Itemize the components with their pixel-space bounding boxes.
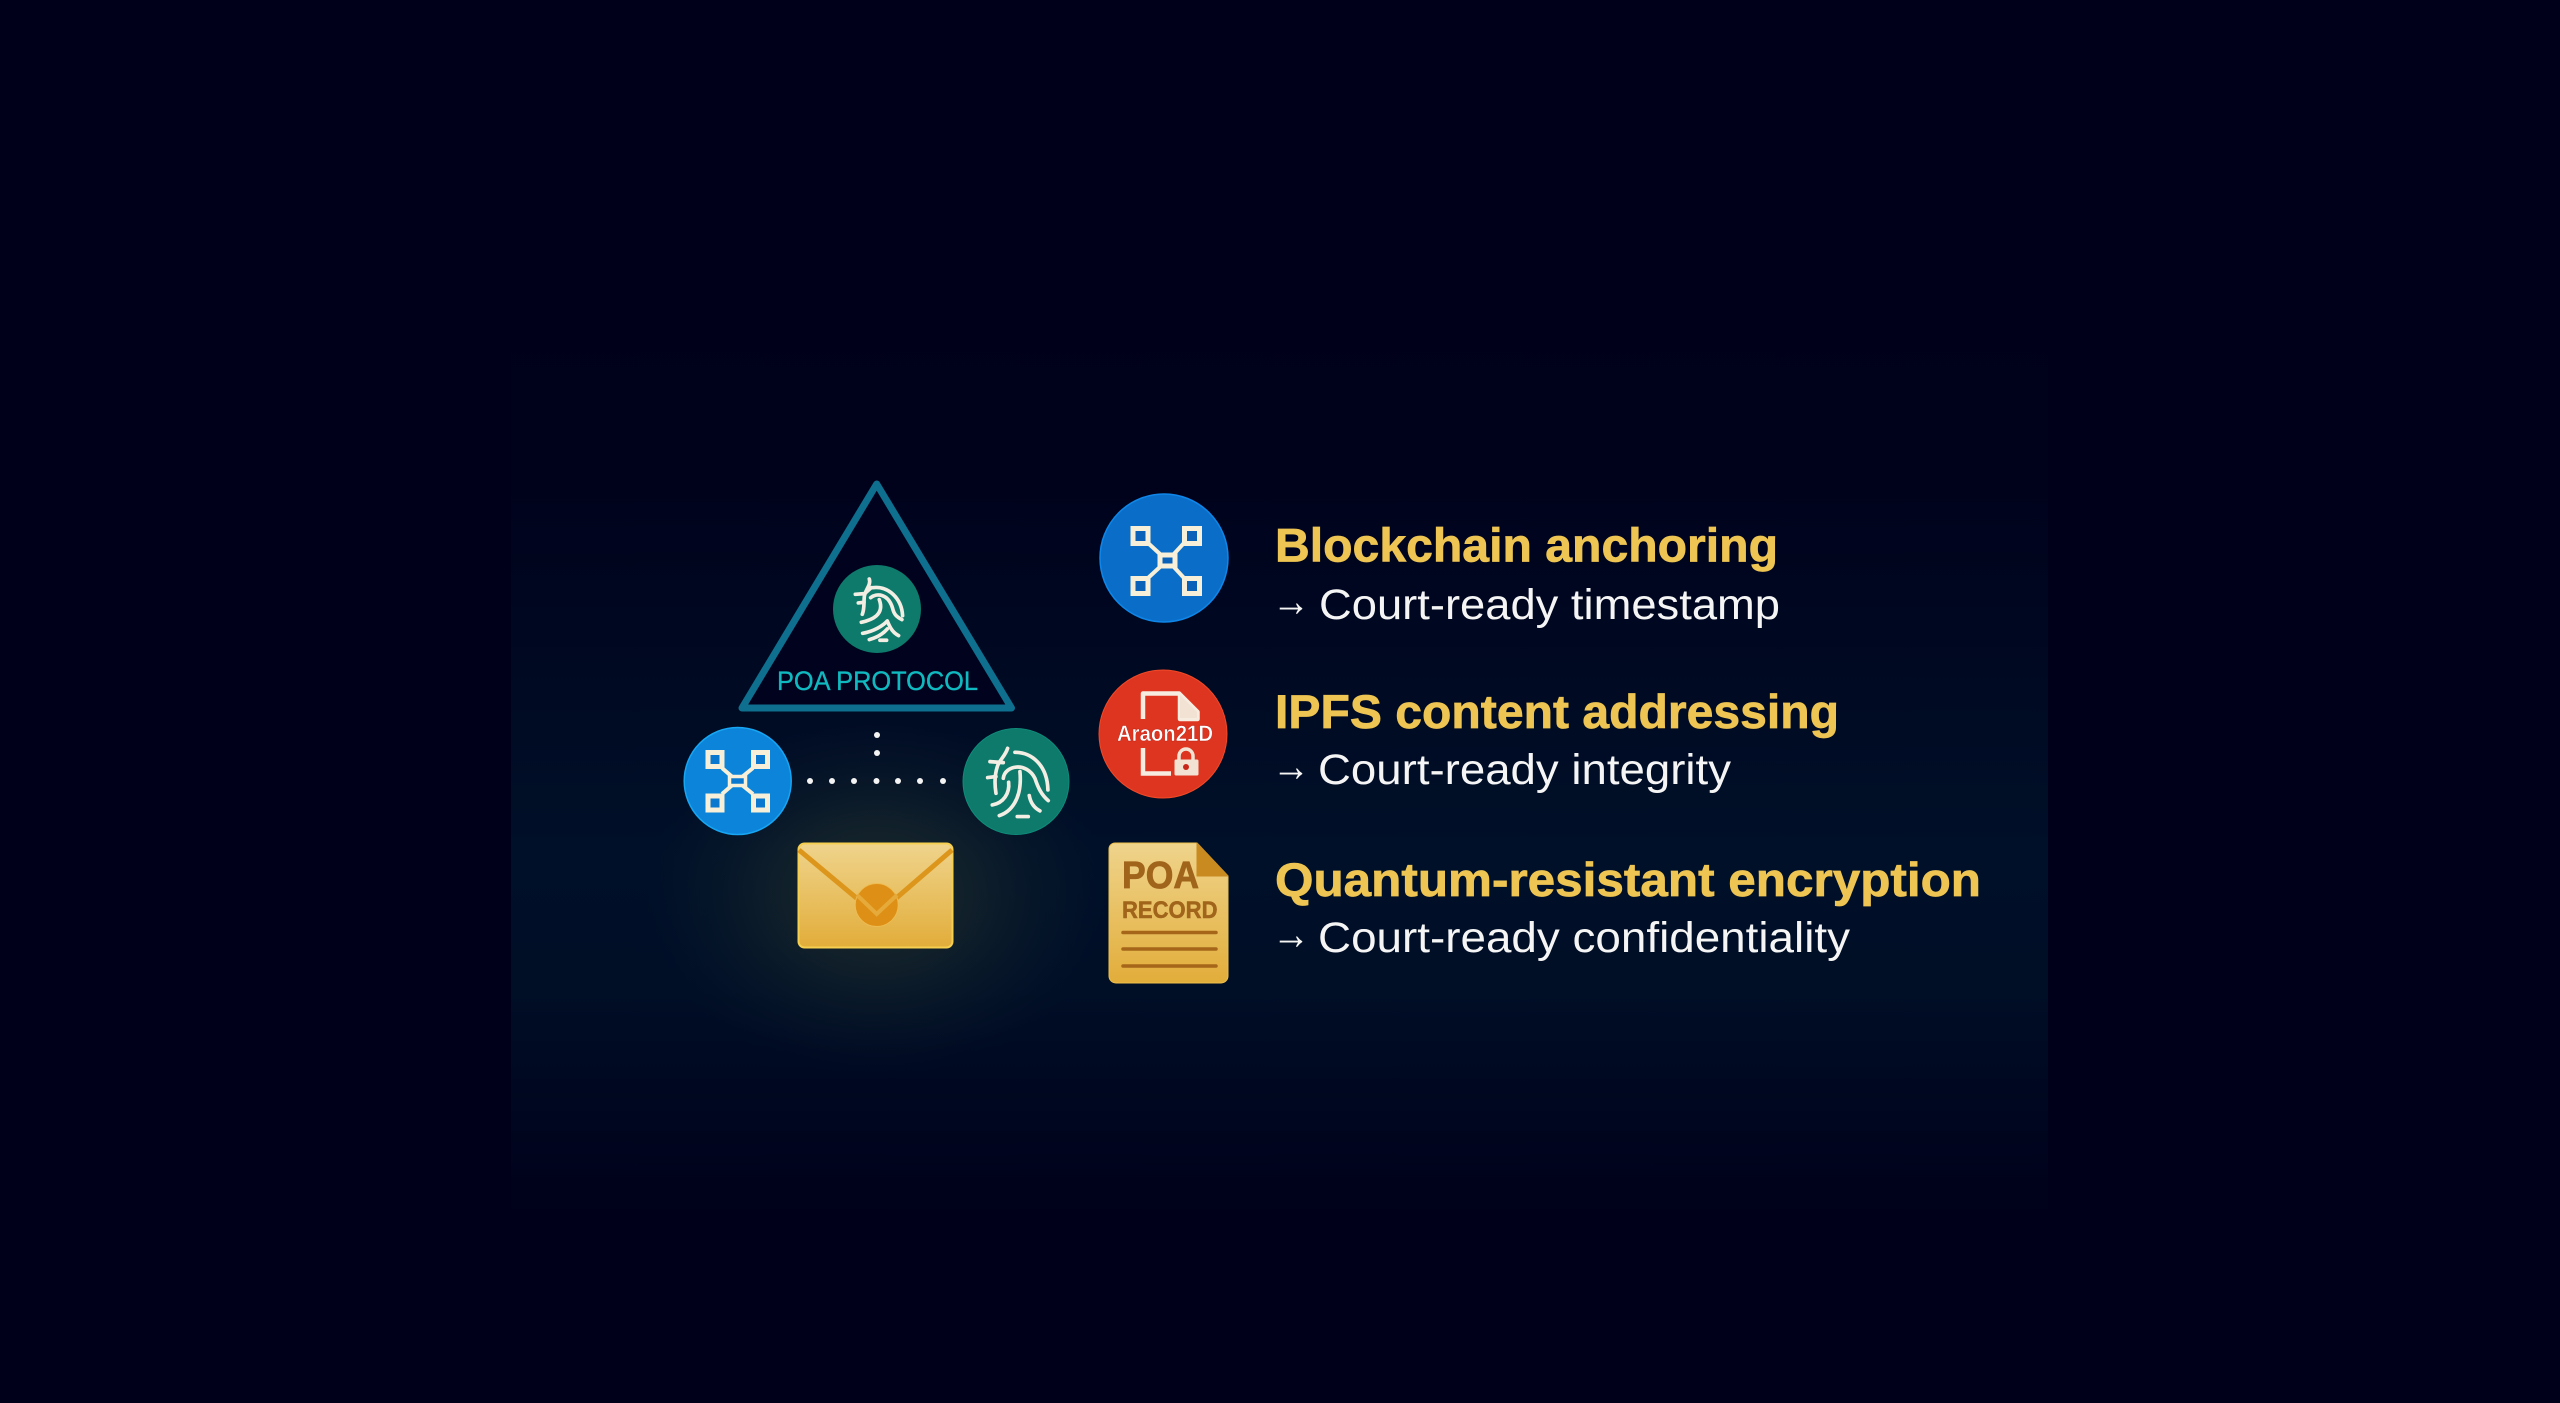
item text: IPFS content addressing: IPFS content addressing: [1275, 685, 1839, 738]
background panel: [511, 300, 2048, 1220]
icon: IPFS Araon21D: Araon21D: [1117, 721, 1213, 746]
item text: blockchain anchoring: →: [1272, 577, 1310, 626]
icon: POA record document: [1109, 843, 1228, 983]
icon: fingerprint in triangle: [833, 565, 921, 653]
item text: IPFS content addressing: →: [1272, 742, 1310, 791]
icon: fingerprint (right): [963, 728, 1069, 834]
item text: quantum-resistant encryption: [1272, 853, 1981, 962]
label: POA PROTOCOL: POA PROTOCOL: [777, 666, 978, 696]
item text: IPFS content addressing: [1272, 685, 1839, 794]
dotted connectors: [807, 732, 946, 784]
icon: network node (left): [684, 728, 791, 834]
icon: POA record document: RECORD: [1122, 897, 1218, 924]
item text: blockchain anchoring: [1272, 518, 1780, 629]
item text: blockchain anchoring: Court-ready timestamp: [1319, 581, 1780, 629]
icon: golden envelope: [798, 844, 952, 948]
item text: quantum-resistant encryption: Quantum-resistant encryption: [1275, 853, 1981, 906]
triangle: POA protocol: [742, 484, 1012, 708]
icon: blockchain: [1100, 494, 1228, 622]
triangle outline: [742, 484, 1012, 708]
envelope glow: [647, 715, 1107, 1075]
item text: IPFS content addressing: Court-ready integrity: [1318, 746, 1732, 794]
item text: quantum-resistant encryption: →: [1272, 910, 1310, 959]
item text: quantum-resistant encryption: Court-ready confidentiality: [1318, 914, 1851, 962]
icon: POA record document: POA: [1122, 855, 1199, 897]
item text: blockchain anchoring: Blockchain anchoring: [1275, 518, 1778, 572]
icon: IPFS Araon21D: [1099, 670, 1227, 798]
